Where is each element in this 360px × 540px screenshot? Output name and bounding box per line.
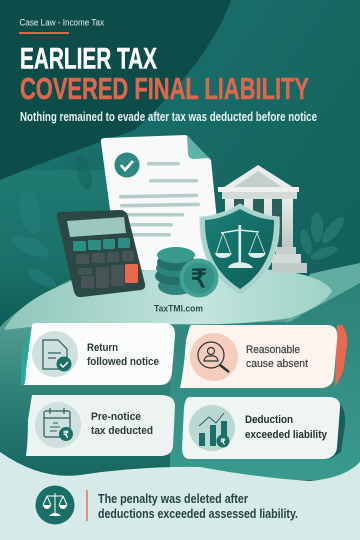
card: reasonable cause absent xyxy=(180,325,347,388)
icon: calendar rupee: ₹ xyxy=(63,430,69,440)
icon: calendar rupee xyxy=(35,402,81,448)
platform xyxy=(4,267,332,330)
illustration: shield with scales xyxy=(200,204,279,295)
illustration: rupee coin xyxy=(180,258,218,298)
illustration: document xyxy=(101,135,222,270)
footer band xyxy=(0,452,360,540)
title: EARLIER TAX xyxy=(20,42,157,76)
category label: Case Law - Income Tax xyxy=(20,18,104,28)
card text: cause absent xyxy=(246,358,308,370)
footer text: deductions exceeded assessed liability. xyxy=(98,507,298,521)
card accent: left teal xyxy=(21,328,30,385)
card text: exceeded liability xyxy=(245,429,328,441)
card text xyxy=(245,414,328,441)
icon: document check xyxy=(32,331,78,377)
card text: Reasonable xyxy=(246,344,300,356)
card text: Deduction xyxy=(245,414,293,426)
card text xyxy=(246,344,308,370)
card text: followed notice xyxy=(87,356,159,368)
icon: magnifier person xyxy=(190,333,238,381)
icon: growth chart xyxy=(189,405,235,451)
card text: tax deducted xyxy=(91,425,153,437)
footer divider xyxy=(86,490,88,521)
footer icon: scales xyxy=(36,486,74,524)
illustration: coin stack xyxy=(155,247,195,295)
card text xyxy=(91,411,153,437)
title xyxy=(20,42,309,106)
brand: TaxTMI.com xyxy=(154,304,203,314)
illustration: rupee coin: ₹ xyxy=(191,265,207,293)
card: return followed notice xyxy=(24,323,175,385)
card: deduction exceeded liability xyxy=(182,397,345,459)
label underline xyxy=(19,32,69,34)
card text: Pre-notice xyxy=(91,411,141,423)
card text: Return xyxy=(87,342,118,354)
card: pre-notice tax deducted xyxy=(26,395,175,456)
card text xyxy=(87,342,159,368)
footer text: The penalty was deleted after xyxy=(98,492,248,506)
footer text xyxy=(98,492,298,521)
icon: check badge xyxy=(114,152,140,178)
illustration: bank building xyxy=(218,165,307,273)
icon: scales xyxy=(215,225,266,268)
decorative leaves: left xyxy=(8,153,95,291)
icon: growth chart: ₹ xyxy=(220,438,226,446)
decorative leaves: right xyxy=(298,212,348,262)
illustration: calculator xyxy=(57,210,145,297)
